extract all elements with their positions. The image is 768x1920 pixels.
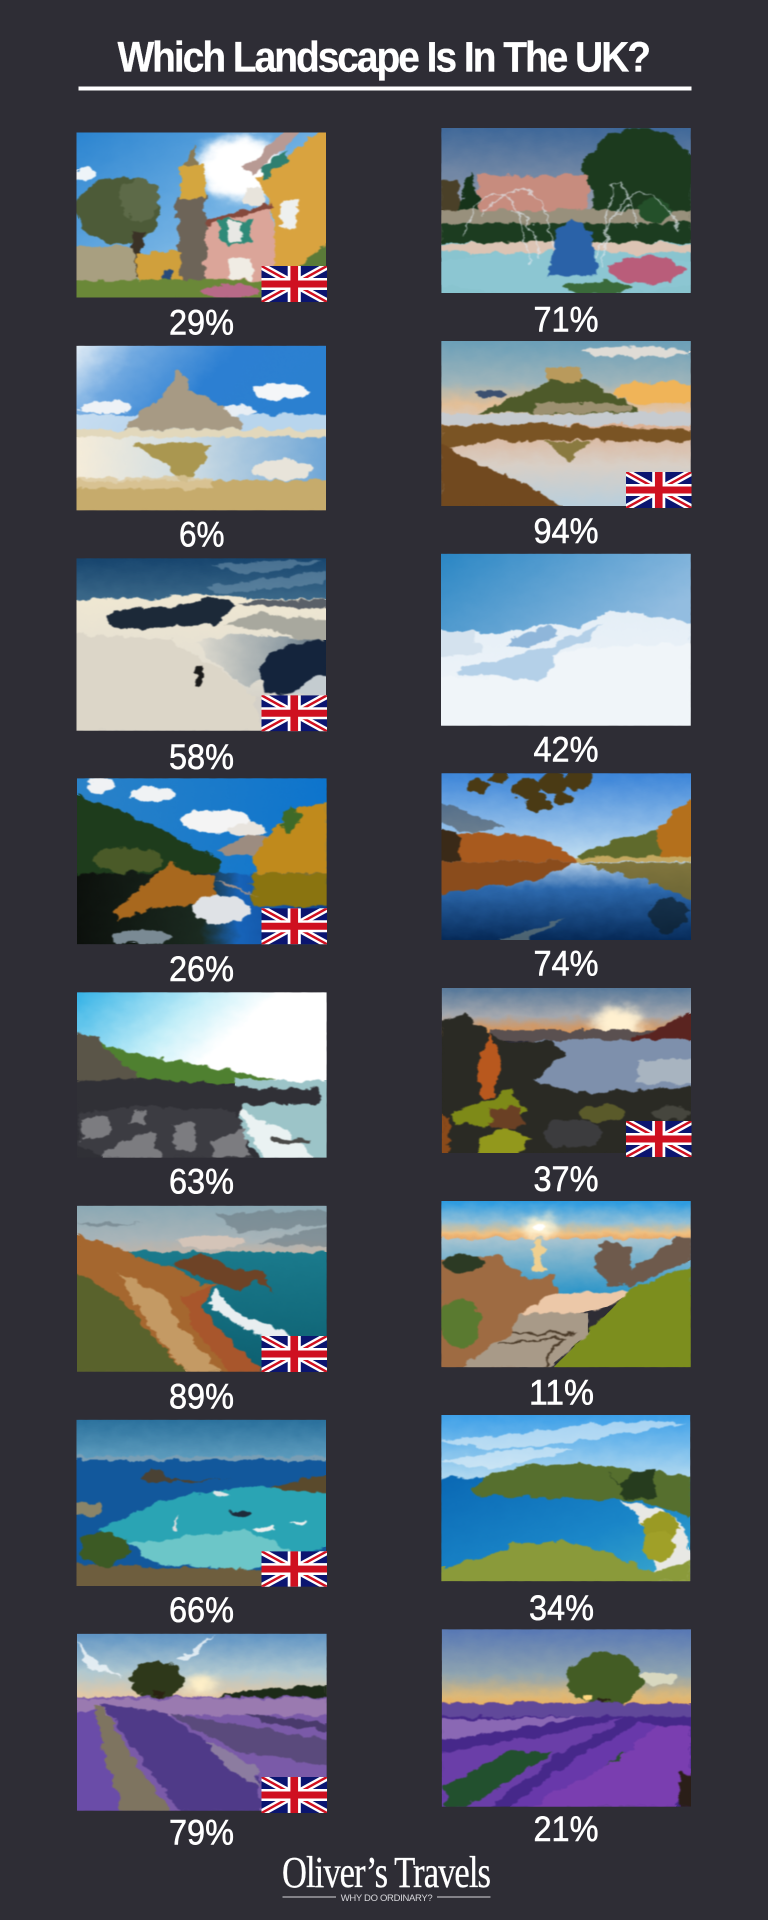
title: Which Landscape Is In The UK? <box>118 34 649 82</box>
photo: abbey island reflected in tidal water <box>76 346 326 510</box>
photo: lavender rows with tree at sunset <box>442 1629 691 1807</box>
photo: hiker on snowy corrie <box>76 558 326 731</box>
percentage: 34% <box>529 1589 594 1628</box>
percentage: 94% <box>534 512 598 551</box>
icon: UK flag <box>626 472 692 508</box>
panel: row 2 left, Mont Saint-Michel <box>76 346 326 554</box>
icon: UK flag <box>262 695 327 731</box>
percentage: 74% <box>534 944 598 984</box>
panel: row 7 right, Mediterranean bay <box>441 1415 690 1628</box>
photo: turquoise bay with boats <box>76 1420 326 1586</box>
panel: row 5 left, Giant's Causeway <box>77 992 327 1202</box>
photo: Italianate village with clock tower <box>76 132 326 298</box>
percentage: 79% <box>169 1814 234 1852</box>
percentage: 66% <box>169 1591 234 1630</box>
panel: row 5 right, rocky coast at sunset <box>442 988 692 1199</box>
panel: row 1 right, fountain garden <box>419 128 713 340</box>
panel: row 2 right, St Michael's Mount <box>441 341 708 551</box>
icon: UK flag <box>262 1551 327 1587</box>
percentage: 11% <box>529 1374 594 1412</box>
panel: row 8 right, Provence lavender field <box>442 1629 691 1849</box>
panel: row 4 left, Scottish loch in autumn <box>77 778 327 989</box>
percentage: 89% <box>169 1378 234 1416</box>
title underline <box>78 86 692 90</box>
icon: UK flag <box>262 266 327 302</box>
percentage: 21% <box>534 1810 598 1849</box>
photo: mossy boulders and tidal pool <box>442 988 691 1153</box>
photo: sunrise over cove with boardwalk <box>441 1201 691 1368</box>
photo: tidal island with castle at sunset <box>441 341 691 506</box>
icon: UK flag <box>262 1336 327 1372</box>
percentage: 63% <box>169 1162 234 1202</box>
percentage: 58% <box>169 738 234 777</box>
panel: row 8 left, English lavender field <box>77 1634 327 1852</box>
panel: row 3 left, snowy Scottish mountain <box>76 558 327 777</box>
percentage: 26% <box>169 950 234 989</box>
photo: green headland and blue bay <box>441 1415 690 1582</box>
logo tagline: WHY DO ORDINARY? <box>341 1893 433 1904</box>
percentage: 29% <box>169 304 234 342</box>
panel: row 4 right, still autumn lake <box>442 771 691 984</box>
percentage: 42% <box>534 730 598 770</box>
logo wordmark: Oliver’s Travels <box>282 1848 490 1897</box>
panel: row 3 right, snowy alpine peaks <box>441 554 691 770</box>
panel: row 6 left, Durdle Door <box>77 1206 327 1416</box>
percentage: 37% <box>534 1160 598 1199</box>
photo: fountain in front of pink villa <box>441 128 691 293</box>
photo: basalt columns on the coast <box>77 992 327 1158</box>
percentage: 6% <box>179 516 224 554</box>
photo: lavender rows with lone oak <box>77 1634 327 1811</box>
photo: limestone arch above turquoise sea <box>77 1206 327 1372</box>
photo: autumn lake with overhanging leaves <box>442 773 691 940</box>
icon: UK flag <box>626 1121 692 1157</box>
logo: Oliver's Travels <box>282 1848 490 1904</box>
photo: autumn forest reflected in loch <box>77 778 327 944</box>
percentage: 71% <box>534 300 598 340</box>
panel: row 1 left, Portmeirion village <box>71 132 327 342</box>
panel: row 7 left, Channel Islands bay <box>76 1420 327 1630</box>
icon: UK flag <box>262 1777 327 1813</box>
icon: UK flag <box>262 908 327 944</box>
photo: white snow peaks under blue sky <box>441 554 691 726</box>
panel: row 6 right, Algarve cove <box>441 1201 691 1412</box>
